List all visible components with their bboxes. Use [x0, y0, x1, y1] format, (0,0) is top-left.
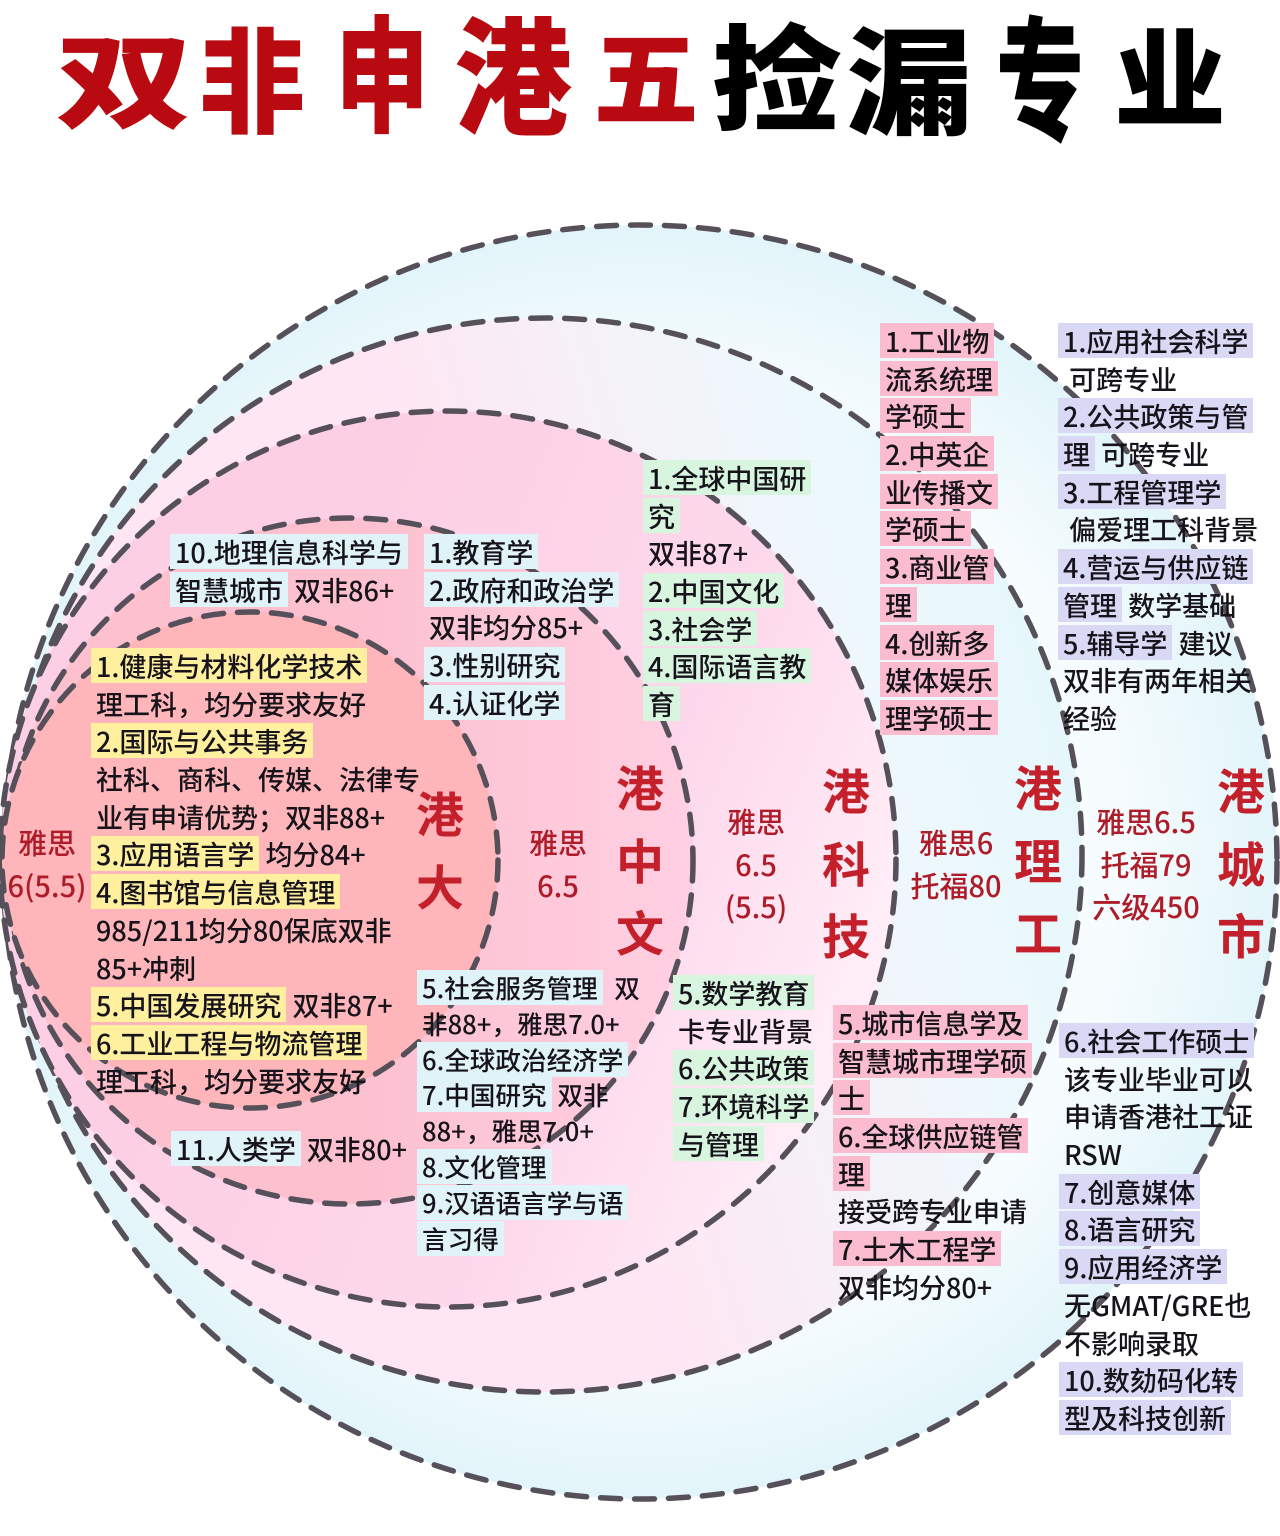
- language requirement: 港科技: 雅思 6.5 (5.5): [725, 800, 787, 927]
- programme list: 港中文 upper: 2.政府和政治学: [429, 570, 614, 609]
- circle: 港大: [2, 612, 498, 1108]
- programme list: 港大: 业有申请优势；双非88+: [96, 797, 385, 836]
- programme list: 港理工 upper: 1.工业物: [885, 321, 989, 360]
- programme list: 港中文 upper: 3.性别研究: [429, 645, 560, 684]
- programme list: 港城市 upper: 偏爱理工科背景: [1069, 509, 1258, 548]
- programme: 地理信息科学与智慧城市: 10.地理信息科学与: [175, 532, 403, 571]
- programme list: 港城市 lower: 申请香港社工证: [1064, 1096, 1253, 1135]
- school name: 港中文: [616, 750, 664, 965]
- programme list: 港大: 理工科，均分要求友好: [96, 1061, 366, 1100]
- programme list: 港科技 upper: 4.国际语言教: [648, 646, 806, 685]
- circle: 港科技: [0, 411, 896, 1307]
- programme list: 港理工 upper: 流系统理: [885, 359, 993, 398]
- programme list: 港城市 upper: 5.辅导学: [1063, 622, 1167, 662]
- school name: 港中文: 文: [616, 895, 664, 965]
- programme list: 港中文 lower: 9.汉语语言学与语: [422, 1184, 623, 1221]
- programme: 人类学: 11.人类学: [176, 1129, 296, 1168]
- programme list: 港城市 upper: 可跨专业: [1069, 359, 1177, 398]
- programme list: 港中文 lower: 双: [614, 969, 640, 1006]
- programme list: 港科技 lower: 5.数学教育: [678, 973, 809, 1012]
- school name: 港大: 大: [416, 848, 464, 918]
- programme list: 港中文 lower: 88+，雅思7.0+: [422, 1112, 594, 1149]
- programme list: 港中文 lower: 5.社会服务管理: [422, 969, 598, 1006]
- programme list: 港科技 lower: 卡专业背景: [678, 1011, 813, 1050]
- programme list: 港科技 lower: 6.公共政策: [678, 1048, 809, 1087]
- programme list: 港城市 upper: 经验: [1063, 698, 1117, 737]
- programme list: 港城市 lower: 型及科技创新: [1064, 1398, 1226, 1437]
- programme list: 港科技 lower: 与管理: [678, 1124, 759, 1163]
- programme list: 港大: [91, 646, 420, 1100]
- school name: 港城市: 市: [1217, 898, 1265, 968]
- programme list: 港科技 upper: 2.中国文化: [648, 571, 779, 610]
- programme list: 港城市 upper: [1058, 321, 1258, 737]
- language requirement: 港大: 雅思 6(5.5): [8, 821, 86, 906]
- programme list: 港中文 lower: 7.中国研究: [422, 1076, 547, 1113]
- programme list: 港城市 upper: 建议: [1178, 622, 1233, 662]
- programme list: 港科技 upper: [643, 458, 811, 723]
- programme list: 港科技 upper: 究: [648, 496, 675, 535]
- school name: 港城市: 港: [1217, 753, 1265, 823]
- school name: 港理工: [1014, 750, 1062, 965]
- programme list: 港理工 lower: 接受跨专业申请: [838, 1191, 1027, 1230]
- programme list: 港理工 upper: 理: [885, 585, 912, 624]
- programme: 地理信息科学与智慧城市: [170, 532, 408, 609]
- school name: 港大: 港: [416, 776, 464, 846]
- school name: 港科技: [822, 753, 870, 968]
- programme list: 港大: 85+冲刺: [96, 948, 196, 986]
- programme: 地理信息科学与智慧城市: 智慧城市: [175, 570, 283, 609]
- programme list: 港中文 upper: 1.教育学: [429, 532, 533, 571]
- programme list: 港理工 upper: 3.商业管: [885, 547, 989, 586]
- programme list: 港中文 lower: [417, 969, 640, 1257]
- school name: 港城市: 城: [1217, 826, 1265, 896]
- programme list: 港城市 upper: 管理: [1063, 585, 1117, 624]
- school name: 港科技: 科: [822, 826, 870, 896]
- programme list: 港大: 985/211均分80保底双非: [96, 910, 392, 949]
- programme list: 港科技 lower: 7.环境科学: [678, 1086, 809, 1125]
- school name: 港城市: [1217, 753, 1265, 968]
- programme list: 港城市 lower: RSW: [1064, 1134, 1122, 1173]
- title: 五: [593, 0, 699, 145]
- school name: 港中文: 港: [616, 750, 664, 820]
- programme list: 港理工 lower: 6.全球供应链管: [838, 1116, 1023, 1155]
- programme list: 港城市 lower: 8.语言研究: [1064, 1209, 1195, 1248]
- programme list: 港理工 upper: 媒体娱乐: [885, 660, 993, 699]
- school name: 港理工: 工: [1014, 895, 1062, 965]
- programme list: 港理工 upper: 理学硕士: [885, 698, 993, 737]
- programme list: 港中文 lower: 6.全球政治经济学: [422, 1041, 623, 1078]
- school name: 港科技: 技: [822, 898, 870, 968]
- programme list: 港城市 upper: 3.工程管理学: [1063, 472, 1221, 511]
- programme list: 港中文 lower: 非88+，雅思7.0+: [422, 1005, 620, 1042]
- programme list: 港城市 upper: 可跨专业: [1101, 434, 1209, 473]
- programme list: 港大: 双非87+: [292, 985, 393, 1024]
- programme list: 港中文 upper: 双非均分85+: [429, 607, 583, 646]
- programme list: 港中文 lower: 言习得: [422, 1220, 499, 1257]
- title: 业: [1114, 0, 1226, 149]
- title: 双: [56, 0, 192, 150]
- programme list: 港中文 lower: 8.文化管理: [422, 1148, 547, 1185]
- programme list: 港城市 upper: 理: [1063, 434, 1090, 473]
- language requirement: 港中文: 雅思 6.5: [529, 821, 587, 906]
- programme list: 港理工 upper: 业传播文: [885, 472, 993, 511]
- programme list: 港城市 lower: 无GMAT/GRE也: [1064, 1285, 1251, 1324]
- programme list: 港城市 upper: 4.营运与供应链: [1063, 547, 1248, 586]
- school name: 港理工: 港: [1014, 750, 1062, 820]
- programme list: 港城市 upper: 1.应用社会科学: [1063, 321, 1248, 360]
- programme list: 港理工 upper: 2.中英企: [885, 434, 989, 473]
- school name: 港大: [416, 776, 464, 918]
- programme list: 港大: 2.国际与公共事务: [96, 721, 308, 760]
- programme list: 港城市 lower: 10.数劾码化转: [1064, 1360, 1238, 1399]
- school name: 港科技: 港: [822, 753, 870, 823]
- programme list: 港大: 1.健康与材料化学技术: [96, 646, 362, 685]
- language requirement: 港理工: 雅思6 托福80: [910, 821, 1002, 906]
- programme list: 港科技 lower: [673, 973, 814, 1163]
- programme list: 港城市 lower: 6.社会工作硕士: [1064, 1021, 1249, 1060]
- programme list: 港城市 lower: 9.应用经济学: [1064, 1247, 1222, 1286]
- programme: 人类学: 双非80+: [307, 1129, 407, 1168]
- programme list: 港城市 lower: 7.创意媒体: [1064, 1172, 1195, 1211]
- programme list: 港中文 lower: 双非: [557, 1076, 609, 1113]
- programme list: 港大: 理工科，均分要求友好: [96, 684, 366, 723]
- programme list: 港科技 upper: 1.全球中国研: [648, 458, 806, 497]
- programme list: 港城市 upper: 2.公共政策与管: [1063, 396, 1248, 435]
- programme list: 港大: 社科、商科、传媒、法律专: [96, 759, 420, 798]
- programme list: 港大: 6.工业工程与物流管理: [96, 1023, 362, 1062]
- programme list: 港大: 3.应用语言学: [96, 834, 254, 873]
- programme list: 港大: 5.中国发展研究: [96, 985, 281, 1024]
- programme list: 港理工 upper: [880, 321, 998, 737]
- programme list: 港中文 upper: 4.认证化学: [429, 683, 560, 722]
- programme list: 港理工 upper: 4.创新多: [885, 622, 989, 662]
- programme list: 港大: 均分84+: [266, 834, 366, 873]
- programme list: 港理工 lower: 智慧城市理学硕: [838, 1041, 1027, 1080]
- programme list: 港城市 lower: [1059, 1021, 1254, 1437]
- programme list: 港理工 lower: 理: [838, 1154, 865, 1193]
- title: [56, 0, 1226, 160]
- programme list: 港科技 upper: 3.社会学: [648, 609, 752, 648]
- programme list: 港城市 upper: 双非有两年相关: [1063, 660, 1252, 699]
- programme list: 港理工 lower: 士: [838, 1078, 865, 1117]
- programme list: 港城市 upper: 数学基础: [1128, 585, 1236, 624]
- programme list: 港理工 lower: 5.城市信息学及: [838, 1003, 1023, 1042]
- programme: 人类学: [171, 1129, 407, 1168]
- programme list: 港科技 upper: 育: [648, 684, 675, 723]
- programme list: 港中文 upper: [424, 532, 619, 722]
- programme list: 港理工 upper: 学硕士: [885, 396, 966, 435]
- programme list: 港理工 lower: 双非均分80+: [838, 1267, 992, 1306]
- programme: 地理信息科学与智慧城市: 双非86+: [294, 570, 394, 609]
- programme list: 港理工 upper: 学硕士: [885, 509, 966, 548]
- programme list: 港理工 lower: 7.土木工程学: [838, 1229, 996, 1268]
- school name: 港中文: 中: [616, 822, 664, 892]
- language requirement: 港城市: 雅思6.5 托福79 六级450: [1092, 800, 1200, 927]
- circle: 港理工: [8, 318, 1082, 1392]
- programme list: 港城市 lower: 该专业毕业可以: [1064, 1059, 1253, 1098]
- programme list: 港大: 4.图书馆与信息管理: [96, 872, 335, 911]
- programme list: 港科技 upper: 双非87+: [648, 533, 748, 572]
- programme list: 港城市 lower: 不影响录取: [1064, 1322, 1199, 1362]
- programme list: 港理工 lower: [833, 1003, 1032, 1306]
- school name: 港理工: 理: [1014, 822, 1062, 892]
- circle: 港中文: [7, 518, 693, 1204]
